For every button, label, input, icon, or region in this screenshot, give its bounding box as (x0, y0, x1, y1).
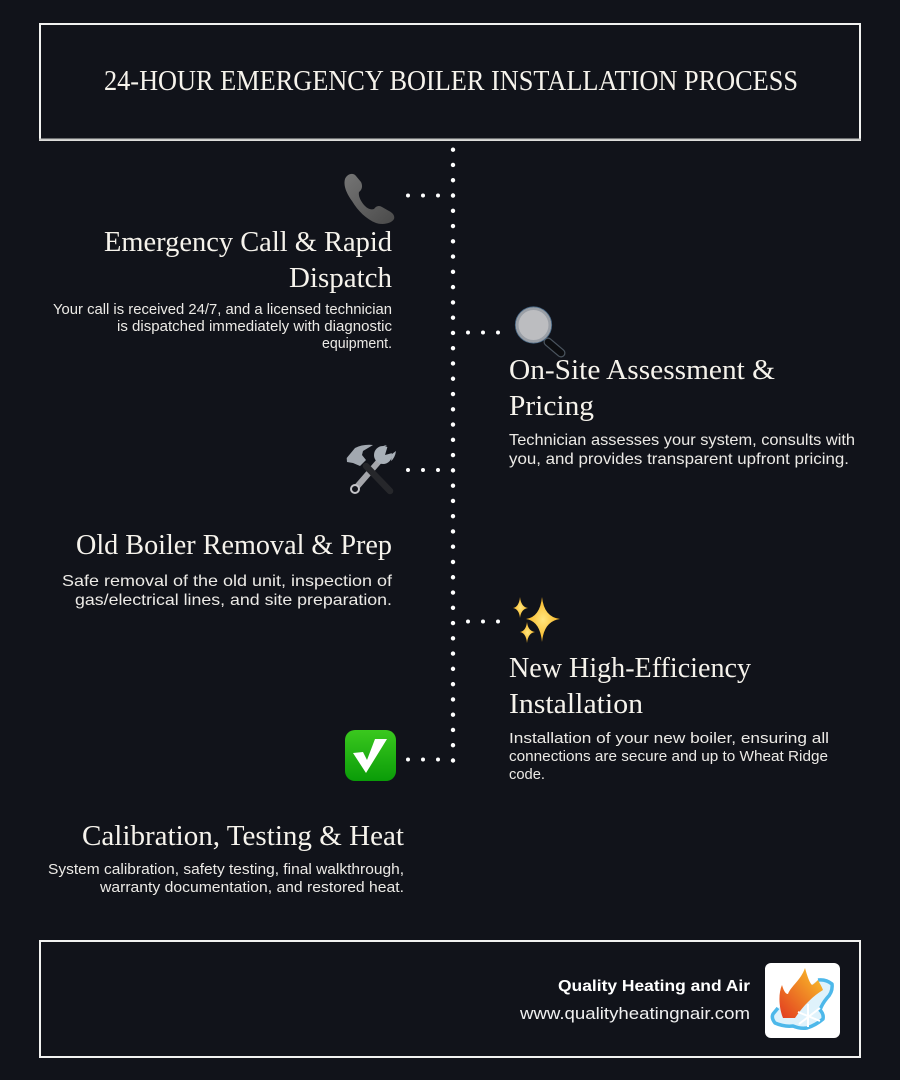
heading: Old Boiler Removal & Prep (76, 529, 392, 561)
description: is dispatched immediately with diagnostic (117, 319, 392, 335)
description: System calibration, safety testing, final walkthrough, (48, 861, 404, 878)
description (509, 432, 855, 468)
step 1: emergency call (53, 174, 394, 352)
heading: Emergency Call & Rapid (104, 226, 392, 258)
logo (765, 963, 840, 1038)
heading: Pricing (509, 390, 594, 422)
description (53, 302, 392, 352)
step 2: on-site assessment (509, 307, 855, 468)
icon: check mark (345, 730, 396, 781)
timeline: vertical dotted line (451, 150, 455, 762)
heading: Calibration, Testing & Heat (82, 820, 404, 852)
website: www.qualityheatingnair.com (519, 1005, 750, 1023)
heading (104, 226, 392, 294)
heading (509, 354, 775, 422)
connector: step 3 (408, 468, 446, 472)
description (509, 730, 829, 783)
heading (509, 652, 751, 720)
heading: On-Site Assessment & (509, 354, 775, 386)
description (62, 573, 393, 609)
heading: New High-Efficiency (509, 652, 751, 684)
header panel (39, 24, 861, 140)
company name: Quality Heating and Air (558, 978, 750, 995)
description: warranty documentation, and restored heat. (99, 879, 404, 896)
description: you, and provides transparent upfront pricing. (509, 451, 849, 468)
description: equipment. (322, 336, 392, 352)
step 4: new installation (509, 597, 829, 783)
description (48, 861, 404, 896)
heading: Dispatch (289, 262, 392, 294)
step 3: old boiler removal (62, 445, 396, 609)
description: gas/electrical lines, and site preparation. (75, 592, 392, 609)
icon: magnifying glass (515, 307, 561, 353)
description: code. (509, 766, 545, 783)
title: 24-HOUR EMERGENCY BOILER INSTALLATION PROCESS (104, 65, 798, 97)
step 5: calibration (48, 730, 404, 896)
description: Your call is received 24/7, and a licensed technician (53, 302, 392, 318)
description: Safe removal of the old unit, inspection of (62, 573, 393, 590)
description: Installation of your new boiler, ensuring all (509, 730, 829, 747)
icon: sparkles (513, 597, 560, 643)
connector: step 4 (468, 620, 506, 624)
connector: step 5 (408, 758, 446, 762)
connector: step 1 (408, 194, 446, 198)
description: connections are secure and up to Wheat Ridge (509, 748, 828, 765)
icon: hammer and wrench (347, 445, 396, 493)
heading: Installation (509, 688, 644, 720)
icon: telephone (344, 174, 394, 224)
footer panel (40, 941, 860, 1057)
description: Technician assesses your system, consults with (509, 432, 855, 449)
connector: step 2 (468, 330, 506, 334)
